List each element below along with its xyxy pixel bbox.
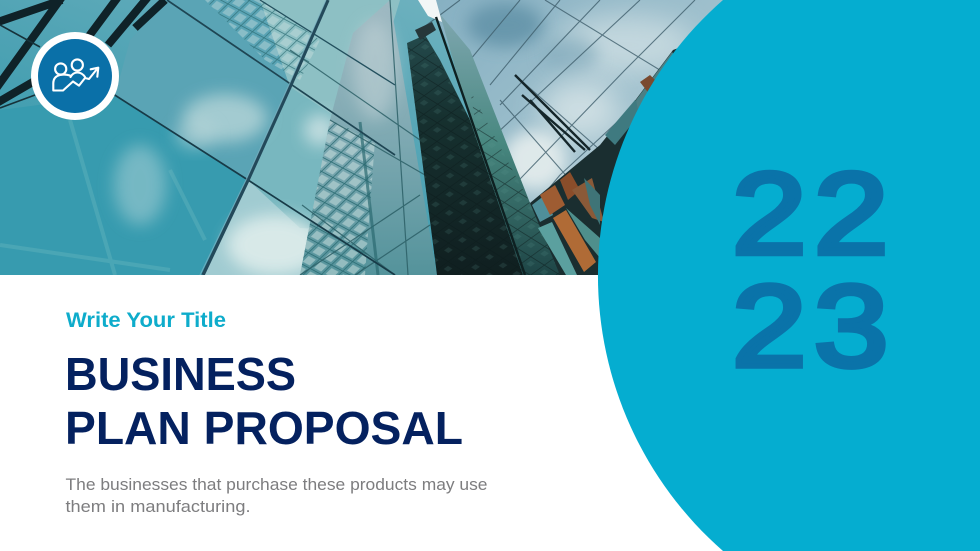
sky panes right	[436, 0, 723, 204]
main heading: BUSINESS	[65, 348, 296, 400]
description text: The businesses that purchase these products may use	[66, 475, 488, 494]
main heading	[65, 348, 463, 454]
dark central wedge	[407, 35, 523, 275]
year numbers	[732, 149, 896, 391]
icon: people and arrow	[53, 59, 98, 90]
photo: glass skyscraper	[0, 0, 730, 275]
icon badge: people and growth arrow	[31, 32, 119, 120]
description text: them in manufacturing.	[66, 497, 251, 516]
green right face	[440, 14, 560, 275]
main heading: PLAN PROPOSAL	[65, 402, 463, 454]
subtitle: Write Your Title	[66, 309, 226, 332]
right building with orange panels	[530, 48, 677, 275]
year numbers: 23	[732, 261, 896, 391]
year numbers: 22	[732, 149, 896, 278]
big teal circle	[598, 0, 980, 551]
main glass mullions	[167, 0, 395, 155]
light left tower	[300, 0, 437, 275]
black frame beams top-left	[0, 0, 165, 104]
description text	[66, 475, 488, 516]
